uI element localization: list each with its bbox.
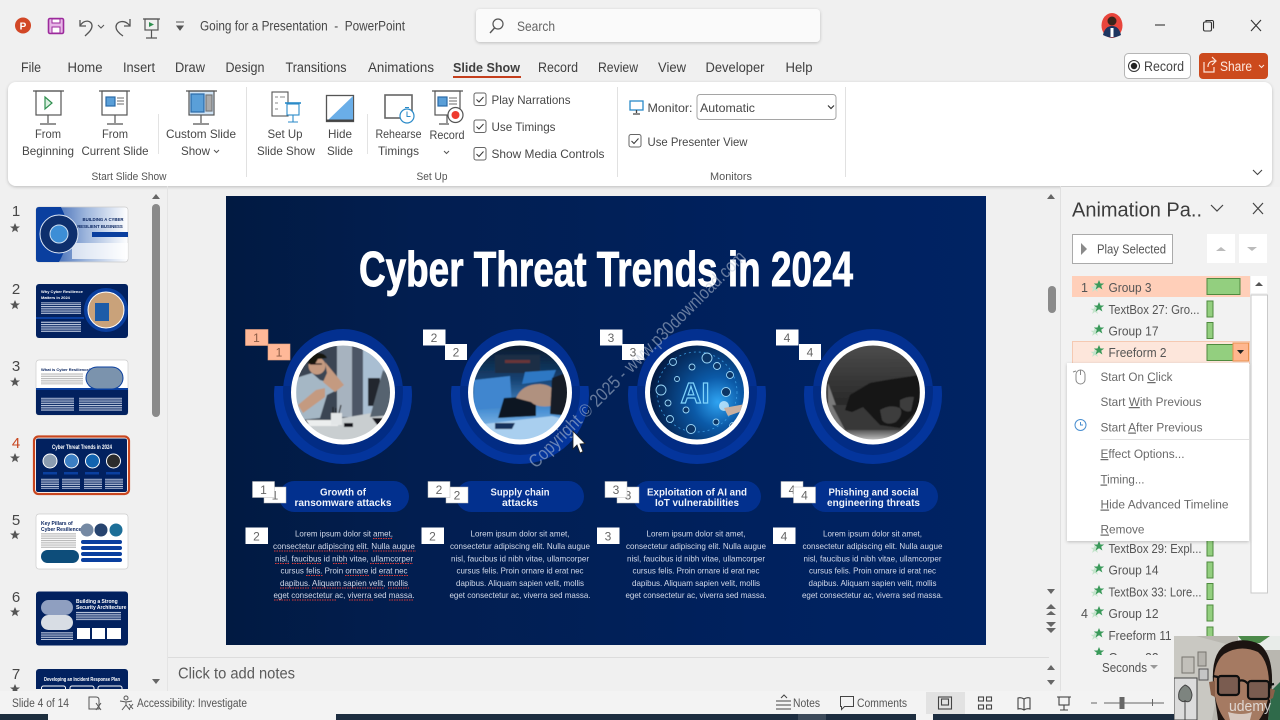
- row: Group 17: [1091, 322, 1213, 338]
- body tag 2: [422, 528, 444, 544]
- notes button: [776, 695, 820, 710]
- ribbon tabs: View: [658, 60, 686, 75]
- body text 3: eget consectetur ac, viverra sed massa.: [626, 591, 766, 600]
- body text 3: cursus felis. Proin ornare id erat nec: [632, 566, 760, 576]
- body text 4: cursus felis. Proin ornare id erat nec: [809, 566, 936, 576]
- icon: undo: [80, 20, 104, 36]
- pill animation tags 2: 2: [454, 488, 461, 502]
- pill heading 4: engineering threats: [827, 498, 920, 509]
- thumbnail 4 active: Cyber Threat Trends in 2024: [52, 445, 112, 451]
- group: start slide show: Show: [181, 144, 210, 158]
- advanced timeline context menu: Hide Advanced Timeline: [1100, 498, 1229, 512]
- thumbnail 5: 5: [12, 512, 20, 529]
- body text 4: eget consectetur ac, viverra sed massa.: [802, 591, 943, 600]
- group: start slide show: Beginning: [22, 144, 74, 158]
- ribbon tabs: Slide Show: [453, 60, 521, 75]
- body tag 3: [597, 528, 620, 544]
- row: Group 3: [1072, 276, 1250, 297]
- record button: [1124, 54, 1190, 78]
- body tag 4: [773, 528, 796, 544]
- body text 1: Lorem ipsum dolor sit amet,: [295, 530, 393, 538]
- badge ring 2: [451, 326, 589, 464]
- row: Freeform 2 selected: Freeform 2: [1108, 346, 1167, 360]
- body text 2: [450, 530, 590, 600]
- icon: clock: [1075, 420, 1086, 430]
- thumbnail 6: [10, 589, 128, 646]
- pill animation tags 4: [781, 482, 816, 503]
- pill heading 3: [633, 481, 761, 512]
- pill heading 3: Exploitation of AI and: [647, 488, 747, 498]
- animation tags 3: 3: [630, 346, 637, 360]
- icon: monitor: [630, 101, 643, 114]
- animation tags 2: 2: [431, 331, 438, 345]
- row: Group 12: Group 12: [1108, 607, 1159, 621]
- body tag 1: [246, 528, 268, 544]
- pill heading 4: Phishing and social: [828, 488, 919, 498]
- icon: save: [48, 18, 64, 34]
- group: start slide show: From: [35, 127, 61, 141]
- accessibility status: Accessibility: Investigate: [137, 698, 247, 710]
- checkbox: use timings: Use Timings: [492, 120, 556, 134]
- body tag 2: 2: [429, 530, 436, 544]
- row: Freeform 2 selected: [1072, 342, 1250, 364]
- ribbon tabs: Transitions: [286, 60, 347, 75]
- list scrollbar: [1251, 276, 1268, 593]
- icon: set up slide show: [272, 92, 301, 122]
- body text 4: [802, 530, 943, 600]
- pill animation tags 1: 1: [260, 483, 267, 497]
- body text 1: consectetur adipiscing elit. Nulla augue: [273, 542, 415, 551]
- ribbon tabs: Help: [786, 60, 812, 75]
- icon: from current slide: [99, 91, 130, 124]
- body text 2: Lorem ipsum dolor sit amet,: [470, 530, 570, 538]
- pill heading 3: IoT vulnerabilities: [655, 498, 739, 509]
- column 4: phishing: [773, 326, 943, 600]
- animation tags 4: 4: [807, 346, 814, 360]
- body text 2: dapibus. Aliquam sapien velit, mollis: [456, 579, 584, 588]
- ribbon tabs: Review: [598, 60, 638, 75]
- photo: AI network: [645, 340, 749, 444]
- column 2: supply chain: [422, 326, 590, 600]
- thumbnail 1: BUILDING A CYBER: [83, 217, 124, 222]
- icon: PowerPoint logo: P: [20, 22, 27, 32]
- body text 3: dapibus. Aliquam sapien velit, mollis: [632, 579, 760, 588]
- advanced timeline context menu: Start On Click: [1100, 370, 1173, 384]
- thumbnail 6: Security Architecture: [76, 605, 127, 611]
- mouse pointer: [573, 431, 585, 453]
- search box: Search: [517, 18, 555, 34]
- body text 2: cursus felis. Proin ornare id erat nec: [456, 566, 584, 576]
- thumbnails scrollbar: [152, 194, 160, 684]
- thumbnail 5: Cyber Resilience: [41, 527, 82, 533]
- body tag 4: 4: [781, 530, 788, 544]
- thumbnail 3: [10, 358, 128, 415]
- animation tags 2: 2: [453, 346, 460, 360]
- icon: collapse ribbon: [1253, 170, 1262, 174]
- ribbon tabs: File: [21, 60, 41, 75]
- icon: present from start: [143, 19, 160, 38]
- notes button: Notes: [793, 698, 820, 710]
- main vertical scrollbar: [1046, 194, 1056, 633]
- reorder buttons: [1207, 234, 1267, 263]
- slide title: Cyber Threat Trends in 2024: [359, 243, 853, 297]
- webcam presenter video: [1174, 636, 1280, 720]
- zoom slider: [1091, 697, 1164, 709]
- thumbnail 5: [10, 512, 128, 569]
- udemy watermark: udemy: [1229, 698, 1271, 715]
- thumbnail 2: 2: [12, 281, 20, 298]
- group: set up: [257, 91, 604, 183]
- group: set up: Slide: [327, 144, 353, 158]
- icon: rehearse timings: [385, 95, 414, 123]
- animation tags 1: 1: [276, 346, 283, 360]
- advanced timeline context menu: [1067, 363, 1249, 541]
- body tag 3: 3: [605, 530, 612, 544]
- group: monitors: Monitor:: [648, 101, 692, 115]
- seconds dropdown: Seconds: [1102, 660, 1147, 675]
- thumbnail 2: Why Cyber Resilience: [41, 289, 84, 294]
- body text 1: dapibus. Aliquam sapien velit, mollis: [280, 579, 408, 588]
- comments button: [840, 696, 907, 710]
- play selected button: Play Selected: [1097, 242, 1166, 256]
- animation tags 1: 1: [253, 331, 260, 345]
- row: Group 14: Group 14: [1108, 564, 1159, 578]
- share button: Share: [1220, 59, 1252, 74]
- thumbnail 2: Matters in 2024: [41, 295, 71, 300]
- status bar: Slide 4 of 14: [12, 698, 70, 710]
- animation list lower rows: [1081, 540, 1213, 665]
- taskbar strip: [0, 714, 1280, 720]
- row: Group 3: Group 3: [1108, 281, 1152, 295]
- pill heading 2: Supply chain: [490, 488, 550, 498]
- dropdown: monitor: Automatic: [700, 101, 755, 115]
- thumbnail 7: Developing an Incident Response Plan: [44, 677, 120, 683]
- body text 4: consectetur adipiscing elit. Nulla augue: [802, 542, 943, 551]
- icon: mouse click: [1073, 370, 1085, 384]
- advanced timeline context menu: Remove: [1100, 522, 1145, 536]
- thumbnail 1: 1: [12, 203, 20, 220]
- advanced timeline context menu: Timing...: [1100, 472, 1144, 486]
- icon: hide slide: [326, 96, 354, 122]
- dropdown: monitor: [697, 94, 836, 120]
- badge ring 3: [628, 326, 766, 464]
- body text 2: eget consectetur ac, viverra sed massa.: [450, 591, 590, 600]
- animation tags 3: 3: [608, 331, 615, 345]
- animation list top rows: [1072, 276, 1250, 364]
- body text 1: eget consectetur ac, viverra sed massa.: [274, 591, 414, 600]
- body text 1: nisl, faucibus id nibh vitae, ullamcorper: [275, 554, 413, 564]
- ribbon tabs: Design: [226, 60, 264, 75]
- pill heading 2: attacks: [502, 498, 538, 509]
- thumbnail 4 active: 4: [12, 435, 20, 452]
- animation tags 2: [423, 330, 467, 360]
- user avatar: [1102, 13, 1122, 38]
- notes area: Click to add notes: [178, 666, 295, 682]
- pill animation tags 4: 4: [789, 483, 796, 497]
- advanced timeline context menu: Start After Previous: [1100, 420, 1202, 434]
- pill animation tags 2: 2: [436, 483, 443, 497]
- body text 1: cursus felis. Proin ornare id erat nec: [280, 566, 408, 576]
- body text 4: dapibus. Aliquam sapien velit, mollis: [808, 579, 936, 588]
- thumbnail 3: 3: [12, 358, 20, 375]
- ribbon tabs: Developer: [706, 60, 765, 75]
- body text 2: nisl, faucibus id nibh vitae, ullamcorper: [451, 554, 589, 564]
- thumbnail 1: [10, 203, 128, 262]
- checkbox: use presenter view: Use Presenter View: [648, 135, 748, 149]
- group: start slide show: [22, 91, 236, 183]
- column 1: ransomware: [246, 326, 416, 600]
- group: set up: Set Up: [268, 127, 303, 141]
- pill animation tags 1: 1: [272, 488, 279, 502]
- row: Group 17: Group 17: [1108, 324, 1159, 338]
- thumbnail 6: Building a Strong: [76, 599, 118, 605]
- group: start slide show: From: [102, 127, 128, 141]
- group: set up: Hide: [328, 127, 352, 141]
- pill animation tags 3: 3: [613, 483, 620, 497]
- group: set up: Timings: [378, 144, 419, 158]
- pill animation tags 3: 3: [625, 488, 632, 502]
- icon: from beginning: [33, 91, 64, 124]
- pane controls: [1211, 203, 1263, 214]
- ribbon tabs: [21, 60, 812, 78]
- icon: redo: [116, 19, 130, 36]
- body text 3: nisl, faucibus id nibh vitae, ullamcorper: [627, 554, 765, 564]
- comments button: Comments: [857, 698, 907, 710]
- icon: record slide show: [432, 91, 463, 124]
- pill animation tags 4: 4: [801, 488, 808, 502]
- accessibility status: [120, 696, 247, 710]
- photo: hacker hands in gloves: [821, 340, 925, 444]
- animation tags 4: [776, 330, 821, 360]
- presenter head: [1209, 640, 1275, 720]
- pill heading 1: ransomware attacks: [294, 498, 392, 509]
- pill heading 1: [279, 481, 409, 512]
- photo: AI network: AI: [680, 378, 710, 410]
- ribbon tabs: Home: [68, 60, 102, 75]
- animation pane: [1061, 187, 1280, 691]
- group: start slide show: Custom Slide: [166, 127, 236, 141]
- pane title: Animation Pa..: [1072, 198, 1202, 222]
- group label: Monitors: [710, 171, 752, 183]
- group: set up: Rehearse: [376, 127, 422, 141]
- record button: Record: [1144, 59, 1184, 74]
- advanced timeline context menu: Effect Options...: [1100, 447, 1184, 461]
- ribbon tabs: Draw: [175, 60, 205, 75]
- pill heading 2: [456, 481, 584, 512]
- group: set up: Slide Show: [257, 144, 315, 158]
- icon: PowerPoint logo: [15, 18, 31, 34]
- icon: spell check: [89, 697, 101, 710]
- advanced timeline context menu: Start With Previous: [1100, 395, 1202, 409]
- thumbnail 4 active: [10, 435, 129, 494]
- photo: stressed man at desk: [291, 340, 395, 444]
- animation tags 3: [600, 330, 644, 360]
- title bar: [15, 9, 1261, 42]
- column 3: AI and IoT: [597, 326, 766, 600]
- checkbox: show media controls: Show Media Controls: [492, 147, 604, 161]
- checkbox: play narrations: Play Narrations: [492, 93, 570, 107]
- search box: [476, 9, 820, 42]
- badge ring 1: [274, 326, 412, 464]
- group: start slide show: Current Slide: [82, 144, 149, 158]
- body text 2: consectetur adipiscing elit. Nulla augue: [450, 542, 590, 551]
- ribbon panel: [8, 82, 1272, 186]
- pill animation tags 2: [428, 482, 468, 503]
- group label: Start Slide Show: [92, 171, 167, 183]
- row: TextBox 29: TextBox 29: Expl...: [1108, 542, 1202, 556]
- thumbnail 3: What is Cyber Resilience?: [41, 367, 92, 372]
- share button: [1199, 53, 1268, 79]
- body text 3: consectetur adipiscing elit. Nulla augue: [626, 542, 766, 551]
- thumbnail 2: [10, 281, 128, 338]
- row: Group 12: 4: [1081, 607, 1088, 621]
- document title: Going for a Presentation - PowerPoint: [200, 18, 405, 34]
- row: Group 22 clipped: Group 22: [1108, 651, 1159, 665]
- main slide: [226, 196, 986, 645]
- row: TextBox 33: TextBox 33: Lore...: [1108, 586, 1202, 600]
- body text 1: [273, 530, 416, 600]
- photo: hands on keyboard: [468, 340, 572, 444]
- window controls: [1155, 20, 1261, 31]
- badge ring 4: [804, 326, 942, 464]
- body text 3: Lorem ipsum dolor sit amet,: [646, 530, 746, 538]
- group: monitors: [629, 94, 836, 183]
- row: Group 3: 1: [1081, 281, 1088, 295]
- thumbnail 7: 7: [12, 666, 20, 683]
- status bar: [0, 691, 1280, 714]
- slide thumbnails panel: [10, 194, 160, 720]
- row: Group 12: [1081, 605, 1213, 621]
- thumbnail 7: [10, 669, 128, 691]
- ribbon tabs: Record: [538, 60, 578, 75]
- ribbon tabs: Insert: [123, 60, 155, 75]
- pill heading 1: Growth of: [320, 488, 367, 498]
- body text 4: nisl, faucibus id nibh vitae, ullamcorper: [804, 554, 942, 564]
- ribbon tabs: Animations: [368, 60, 434, 75]
- play selected button: [1072, 234, 1172, 264]
- row: TextBox 27: TextBox 27: Gro...: [1108, 303, 1200, 317]
- icon: custom slide show: [186, 91, 217, 124]
- animation tags 4: 4: [784, 331, 791, 345]
- body text 3: [626, 530, 766, 600]
- group: set up: Record: [430, 128, 464, 142]
- notes area: [168, 657, 1055, 685]
- body tag 1: 2: [253, 530, 260, 544]
- icon: customize quick access: [176, 22, 184, 30]
- row: Freeform 11: Freeform 11: [1108, 629, 1172, 643]
- thumbnail 6: 6: [12, 589, 20, 606]
- animation tags 1: [246, 330, 290, 360]
- pill animation tags 3: [605, 482, 639, 503]
- pill animation tags 1: [252, 482, 286, 503]
- thumbnail 5: Key Pillars of: [41, 521, 73, 527]
- group label: Set Up: [416, 171, 448, 183]
- thumbnail 1: RESILIENT BUSINESS: [77, 224, 123, 229]
- copyright watermark: Copyright © 2025 - www.p30download.com: [524, 246, 750, 472]
- body text 4: Lorem ipsum dolor sit amet,: [823, 530, 922, 538]
- pill heading 4: [810, 481, 938, 512]
- view buttons: [926, 692, 1071, 714]
